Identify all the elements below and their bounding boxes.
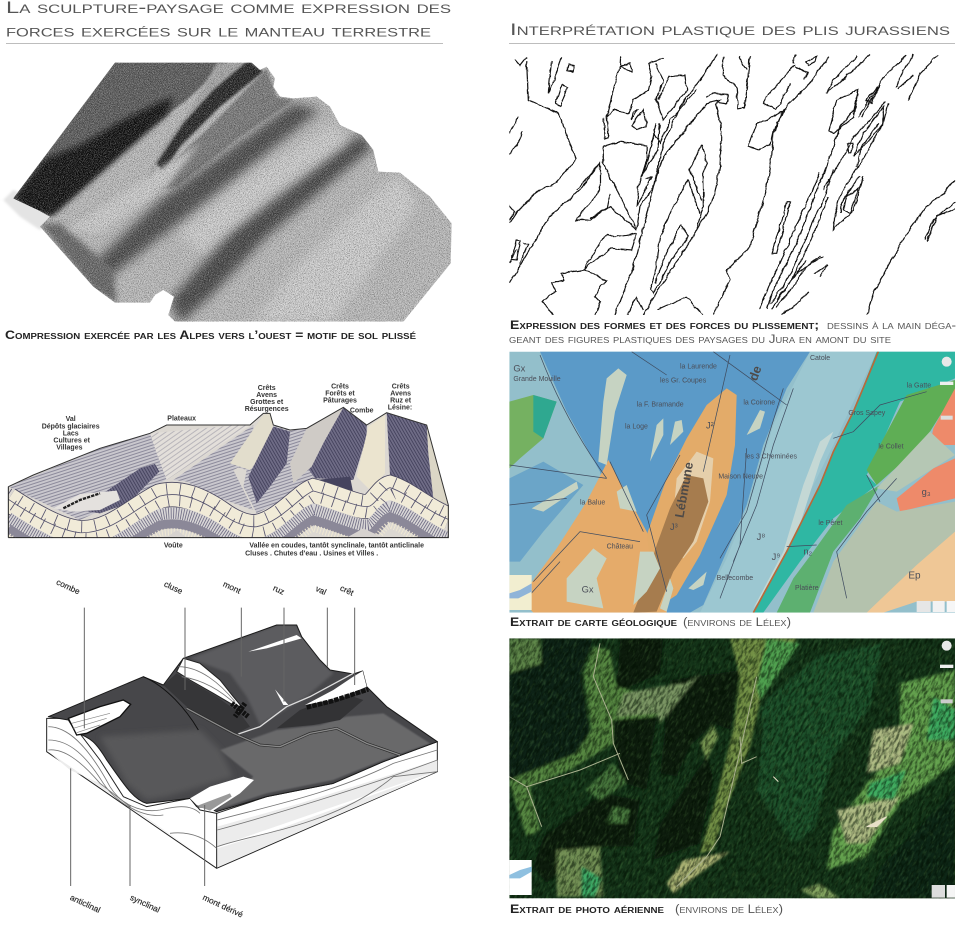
map text: Maison Neuve <box>718 473 763 480</box>
engraving labels: Lacs <box>63 431 79 438</box>
map text: Bellecombe <box>717 575 753 582</box>
engraving labels: Résurgences <box>245 406 289 413</box>
engraving labels: Pâturages <box>323 397 357 404</box>
photo: folded plaster sculpture <box>0 60 457 327</box>
caption: geological map <box>510 617 791 629</box>
right heading: Interprétation plastique des plis jurassiens <box>510 20 950 39</box>
peach zone <box>867 532 955 613</box>
caption: aerial photo: Extrait de photo aérienne <box>510 904 665 916</box>
orange tongue <box>647 388 737 602</box>
strata <box>8 488 448 533</box>
map text: Château <box>607 543 633 550</box>
left heading: forces exercées sur le manteau terrestre <box>6 22 431 40</box>
caption: forms and forces <box>509 320 956 346</box>
terrain labels: anticlinal <box>68 892 102 915</box>
surface outline <box>8 407 448 505</box>
engraving labels: Combe <box>350 408 374 415</box>
top surface <box>50 626 436 812</box>
engraving labels: Val <box>66 416 76 423</box>
engraving: Jura relief cross-section <box>8 383 449 556</box>
orange left fold <box>520 460 667 613</box>
terrain labels: crêt <box>338 583 356 598</box>
map text: la Coirone <box>743 399 775 406</box>
pastures <box>509 638 542 673</box>
roads <box>509 643 757 887</box>
map text: Platière <box>795 585 819 592</box>
blue limestone zone <box>540 352 810 613</box>
terrain labels: mont <box>221 579 243 596</box>
diagram: 3D block of Jura relief <box>43 577 443 920</box>
engraving labels: Vallée en coudes, tantôt synclinale, tantôt anticlinale <box>249 542 424 549</box>
map text: n₂ <box>803 546 813 556</box>
map text: les 3 Cheminées <box>745 453 798 460</box>
geological map: Lébmune <box>672 461 696 519</box>
teal zone <box>753 352 955 613</box>
aerial photo <box>509 638 955 898</box>
engraving labels <box>42 383 424 557</box>
caption: aerial photo: (environs de Lélex) <box>675 904 783 916</box>
caption: forms and forces: Expression des formes et des forces du plissement; <box>510 320 819 332</box>
map text: les Gr. Coupes <box>660 377 707 384</box>
terrain labels: combe <box>55 577 82 597</box>
surface: dark slopes <box>238 415 314 514</box>
map text: la Loge <box>625 423 648 430</box>
grey moraine <box>813 502 955 613</box>
terrain labels <box>55 577 356 920</box>
forest strips <box>307 689 368 707</box>
map text: Gx <box>513 364 526 374</box>
block faces <box>47 718 437 868</box>
brown core <box>633 475 708 613</box>
caption: forms and forces: geant des figures plastiques des paysages du Jura en amont du site <box>509 334 891 346</box>
engraving labels: Villages <box>56 444 83 451</box>
map text: Gx <box>582 584 594 594</box>
engraving labels: Crêts <box>392 383 410 390</box>
map text: g₃ <box>922 487 931 497</box>
caption: forms and forces: dessins à la main déga- <box>827 320 956 332</box>
grey islands <box>532 368 765 612</box>
engraving labels: Crêts <box>258 385 276 392</box>
caption: geological map: (environs de Lélex) <box>683 617 791 629</box>
engraving labels: Grottes et <box>250 399 284 406</box>
photo widgets <box>942 641 952 651</box>
map text: le Pêret <box>818 520 842 527</box>
engraving labels: Dépôts glaciaires <box>42 424 100 431</box>
engraving labels: Plateaux <box>167 416 196 423</box>
map text: J⁹ <box>772 552 780 562</box>
terrain labels: ruz <box>271 583 286 597</box>
forest streak texture <box>509 638 955 898</box>
terrain labels: synclinal <box>128 892 162 915</box>
map text: la F. Bramande <box>637 402 684 409</box>
forest patches <box>509 638 955 898</box>
green zones <box>867 380 955 485</box>
map text: J² <box>706 420 714 430</box>
white cut-outs <box>68 700 131 735</box>
map widgets <box>942 357 952 367</box>
pale bands <box>700 352 877 613</box>
map text: la Gatte <box>907 383 931 390</box>
map text: J⁸ <box>757 532 765 542</box>
engraving labels: Lésine: <box>388 404 412 411</box>
engraving labels: Avens <box>256 392 277 399</box>
map text: Grande Mouille <box>513 376 561 383</box>
line drawing: plastic interpretation of folds <box>509 55 955 315</box>
caption: aerial photo <box>510 904 783 916</box>
engraving labels: Cultures et <box>53 438 91 445</box>
map text: Catole <box>810 355 830 362</box>
engraving labels: Cluses . Chutes d'eau . Usines et Villes . <box>245 550 378 557</box>
leader lines <box>71 608 355 886</box>
terrain labels: val <box>314 583 328 597</box>
salmon zone <box>897 388 955 512</box>
map text: Ep <box>908 570 921 581</box>
surface: hatched plateau <box>10 434 166 520</box>
caption: compression: Compression exercée par les Alpes vers l’ouest = motif de sol plissé <box>5 330 417 342</box>
map lines <box>509 352 927 598</box>
caption: geological map: Extrait de carte géologique <box>510 617 678 629</box>
map text: J³ <box>670 522 678 532</box>
engraving labels: Forêts et <box>325 390 355 397</box>
geological map <box>509 352 955 613</box>
terrain labels: mont dérivé <box>201 892 245 920</box>
engraving labels: Voûte <box>164 542 183 549</box>
terrain labels: cluse <box>162 579 185 596</box>
roads <box>238 673 353 734</box>
engraving labels: Crêts <box>331 383 349 390</box>
geological map: de <box>746 364 765 383</box>
map text: Gros Sapey <box>848 410 886 417</box>
left heading <box>6 0 451 40</box>
map text: la Balue <box>580 499 605 506</box>
engraving labels: Avens <box>390 390 411 397</box>
engraving labels: Ruz et <box>390 397 412 404</box>
map text <box>513 355 931 594</box>
map text: le Collet <box>878 443 904 450</box>
map text: la Laurende <box>680 363 717 370</box>
